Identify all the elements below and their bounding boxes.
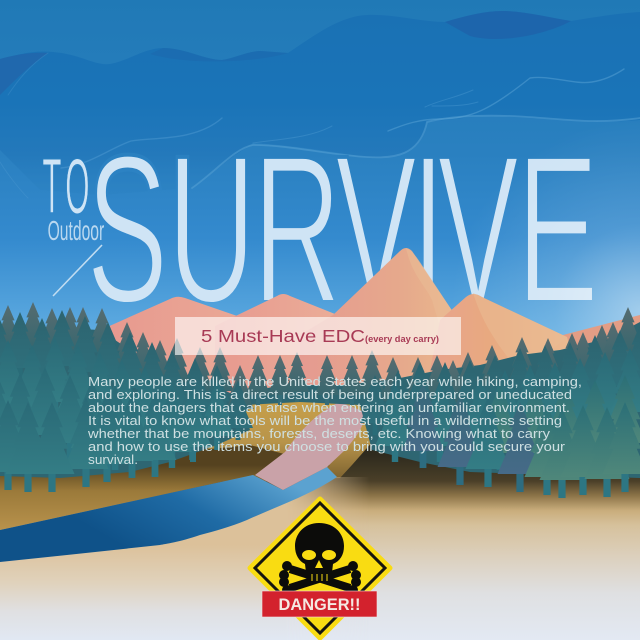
intro text block: and how to use the items you choose to bring with you could secure your bbox=[88, 439, 566, 454]
mountain: second peak bbox=[215, 294, 345, 420]
banner panel bbox=[175, 317, 461, 355]
forest fourth row bbox=[0, 367, 640, 470]
forest back row bbox=[0, 302, 640, 420]
cloud: dark crest centre bbox=[150, 48, 288, 61]
icon: skull bbox=[295, 523, 344, 581]
forest third row bbox=[0, 338, 640, 462]
intro text block: about the dangers that can arise when entering an unfamiliar environment. bbox=[88, 400, 570, 415]
sign yellow diamond bbox=[250, 499, 390, 638]
river bbox=[0, 467, 337, 562]
intro text block bbox=[87, 374, 582, 467]
main peak lit face bbox=[406, 248, 455, 345]
title slash bbox=[53, 245, 102, 296]
sky glow bbox=[400, 100, 640, 420]
cloud: main layered band bbox=[0, 11, 640, 195]
forest second row bbox=[0, 310, 640, 440]
danger label bar bbox=[262, 591, 377, 617]
cloud: dark crest right bbox=[445, 11, 571, 39]
title word: SURVIVE: SURVIVE bbox=[86, 111, 598, 347]
forest backing left bbox=[0, 325, 250, 478]
mountain reflection in river bbox=[255, 402, 365, 490]
left bank bbox=[0, 445, 330, 530]
cloud wisps bbox=[0, 53, 640, 198]
banner note: (every day carry) bbox=[365, 334, 439, 345]
forest front row bbox=[0, 380, 640, 498]
golden valley bbox=[130, 395, 374, 482]
intro text block: and exploring. This is a direct result of being underprepared or uneducated bbox=[88, 387, 572, 402]
right peak lit face bbox=[473, 293, 567, 360]
intro text block: Many people are killed in the United States each year while hiking, camping, bbox=[88, 374, 582, 389]
icon: crossbones bbox=[279, 561, 361, 595]
banner heading: 5 Must-Have EDC bbox=[201, 326, 365, 346]
mountain: main peak bbox=[300, 248, 470, 420]
cloud: dark crest left bbox=[0, 53, 48, 95]
intro text block: whether that be mountains, forests, deserts, etc. Knowing what to carry bbox=[87, 426, 551, 441]
sand foreground bbox=[0, 477, 365, 610]
subtitle banner bbox=[175, 317, 461, 355]
intro text block: survival. bbox=[88, 452, 138, 467]
icon: danger sign bbox=[250, 499, 390, 638]
intro text block: It is vital to know what tools will be the most useful in a wilderness setting bbox=[88, 413, 562, 428]
mountains bbox=[105, 248, 640, 430]
title: To Survive Outdoor bbox=[42, 111, 598, 347]
forest backing right bbox=[240, 322, 640, 478]
danger label text: DANGER!! bbox=[279, 596, 360, 614]
clouds bbox=[0, 11, 640, 198]
mountain: left peak bbox=[105, 297, 290, 420]
title word: TO: TO bbox=[42, 142, 89, 230]
forest bbox=[0, 302, 640, 498]
sign black border bbox=[255, 503, 385, 633]
ground bbox=[0, 440, 640, 640]
mountain: right ridge bbox=[540, 315, 640, 430]
mountain: right peak bbox=[420, 294, 590, 420]
title word: Outdoor: Outdoor bbox=[48, 214, 105, 246]
